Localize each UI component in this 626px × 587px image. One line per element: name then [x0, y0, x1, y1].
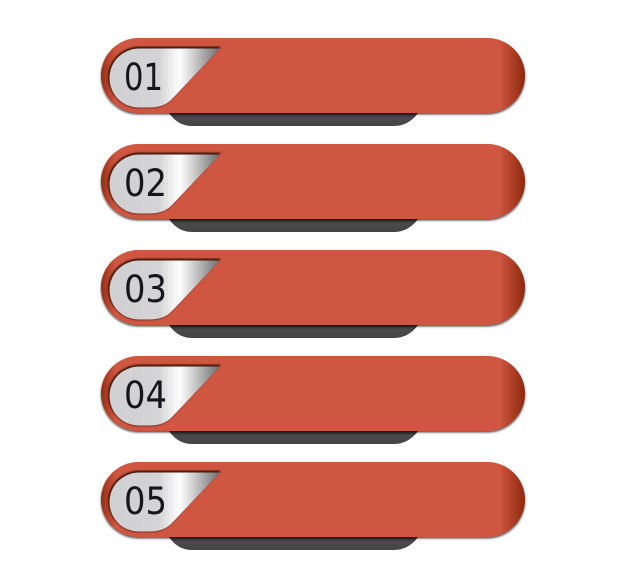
silver number plate 01 [108, 46, 221, 108]
red bar 04 [101, 356, 525, 431]
silver number plate 04 [108, 364, 221, 426]
red bar 02 [101, 144, 525, 219]
banner 04 [101, 356, 525, 444]
silver number plate 03 [108, 258, 221, 320]
banner 02 [101, 144, 525, 232]
banner 03 [101, 250, 525, 338]
silver number plate 02 [108, 152, 221, 214]
silver number plate 05 [108, 470, 221, 532]
number 02: 02 [124, 162, 167, 205]
number 03: 03 [124, 268, 167, 311]
number 01: 01 [124, 56, 163, 99]
dark tab 02 [167, 216, 420, 232]
banner 01 [101, 38, 525, 126]
dark tab 05 [167, 534, 420, 550]
dark tab 03 [167, 322, 420, 338]
dark tab 04 [167, 428, 420, 444]
red bar 03 [101, 250, 525, 325]
red bar 05 [101, 462, 525, 537]
banner 05 [101, 462, 525, 550]
dark tab 01 [167, 110, 420, 126]
number 05: 05 [124, 480, 167, 523]
number 04: 04 [124, 374, 167, 417]
red bar 01 [101, 38, 525, 113]
